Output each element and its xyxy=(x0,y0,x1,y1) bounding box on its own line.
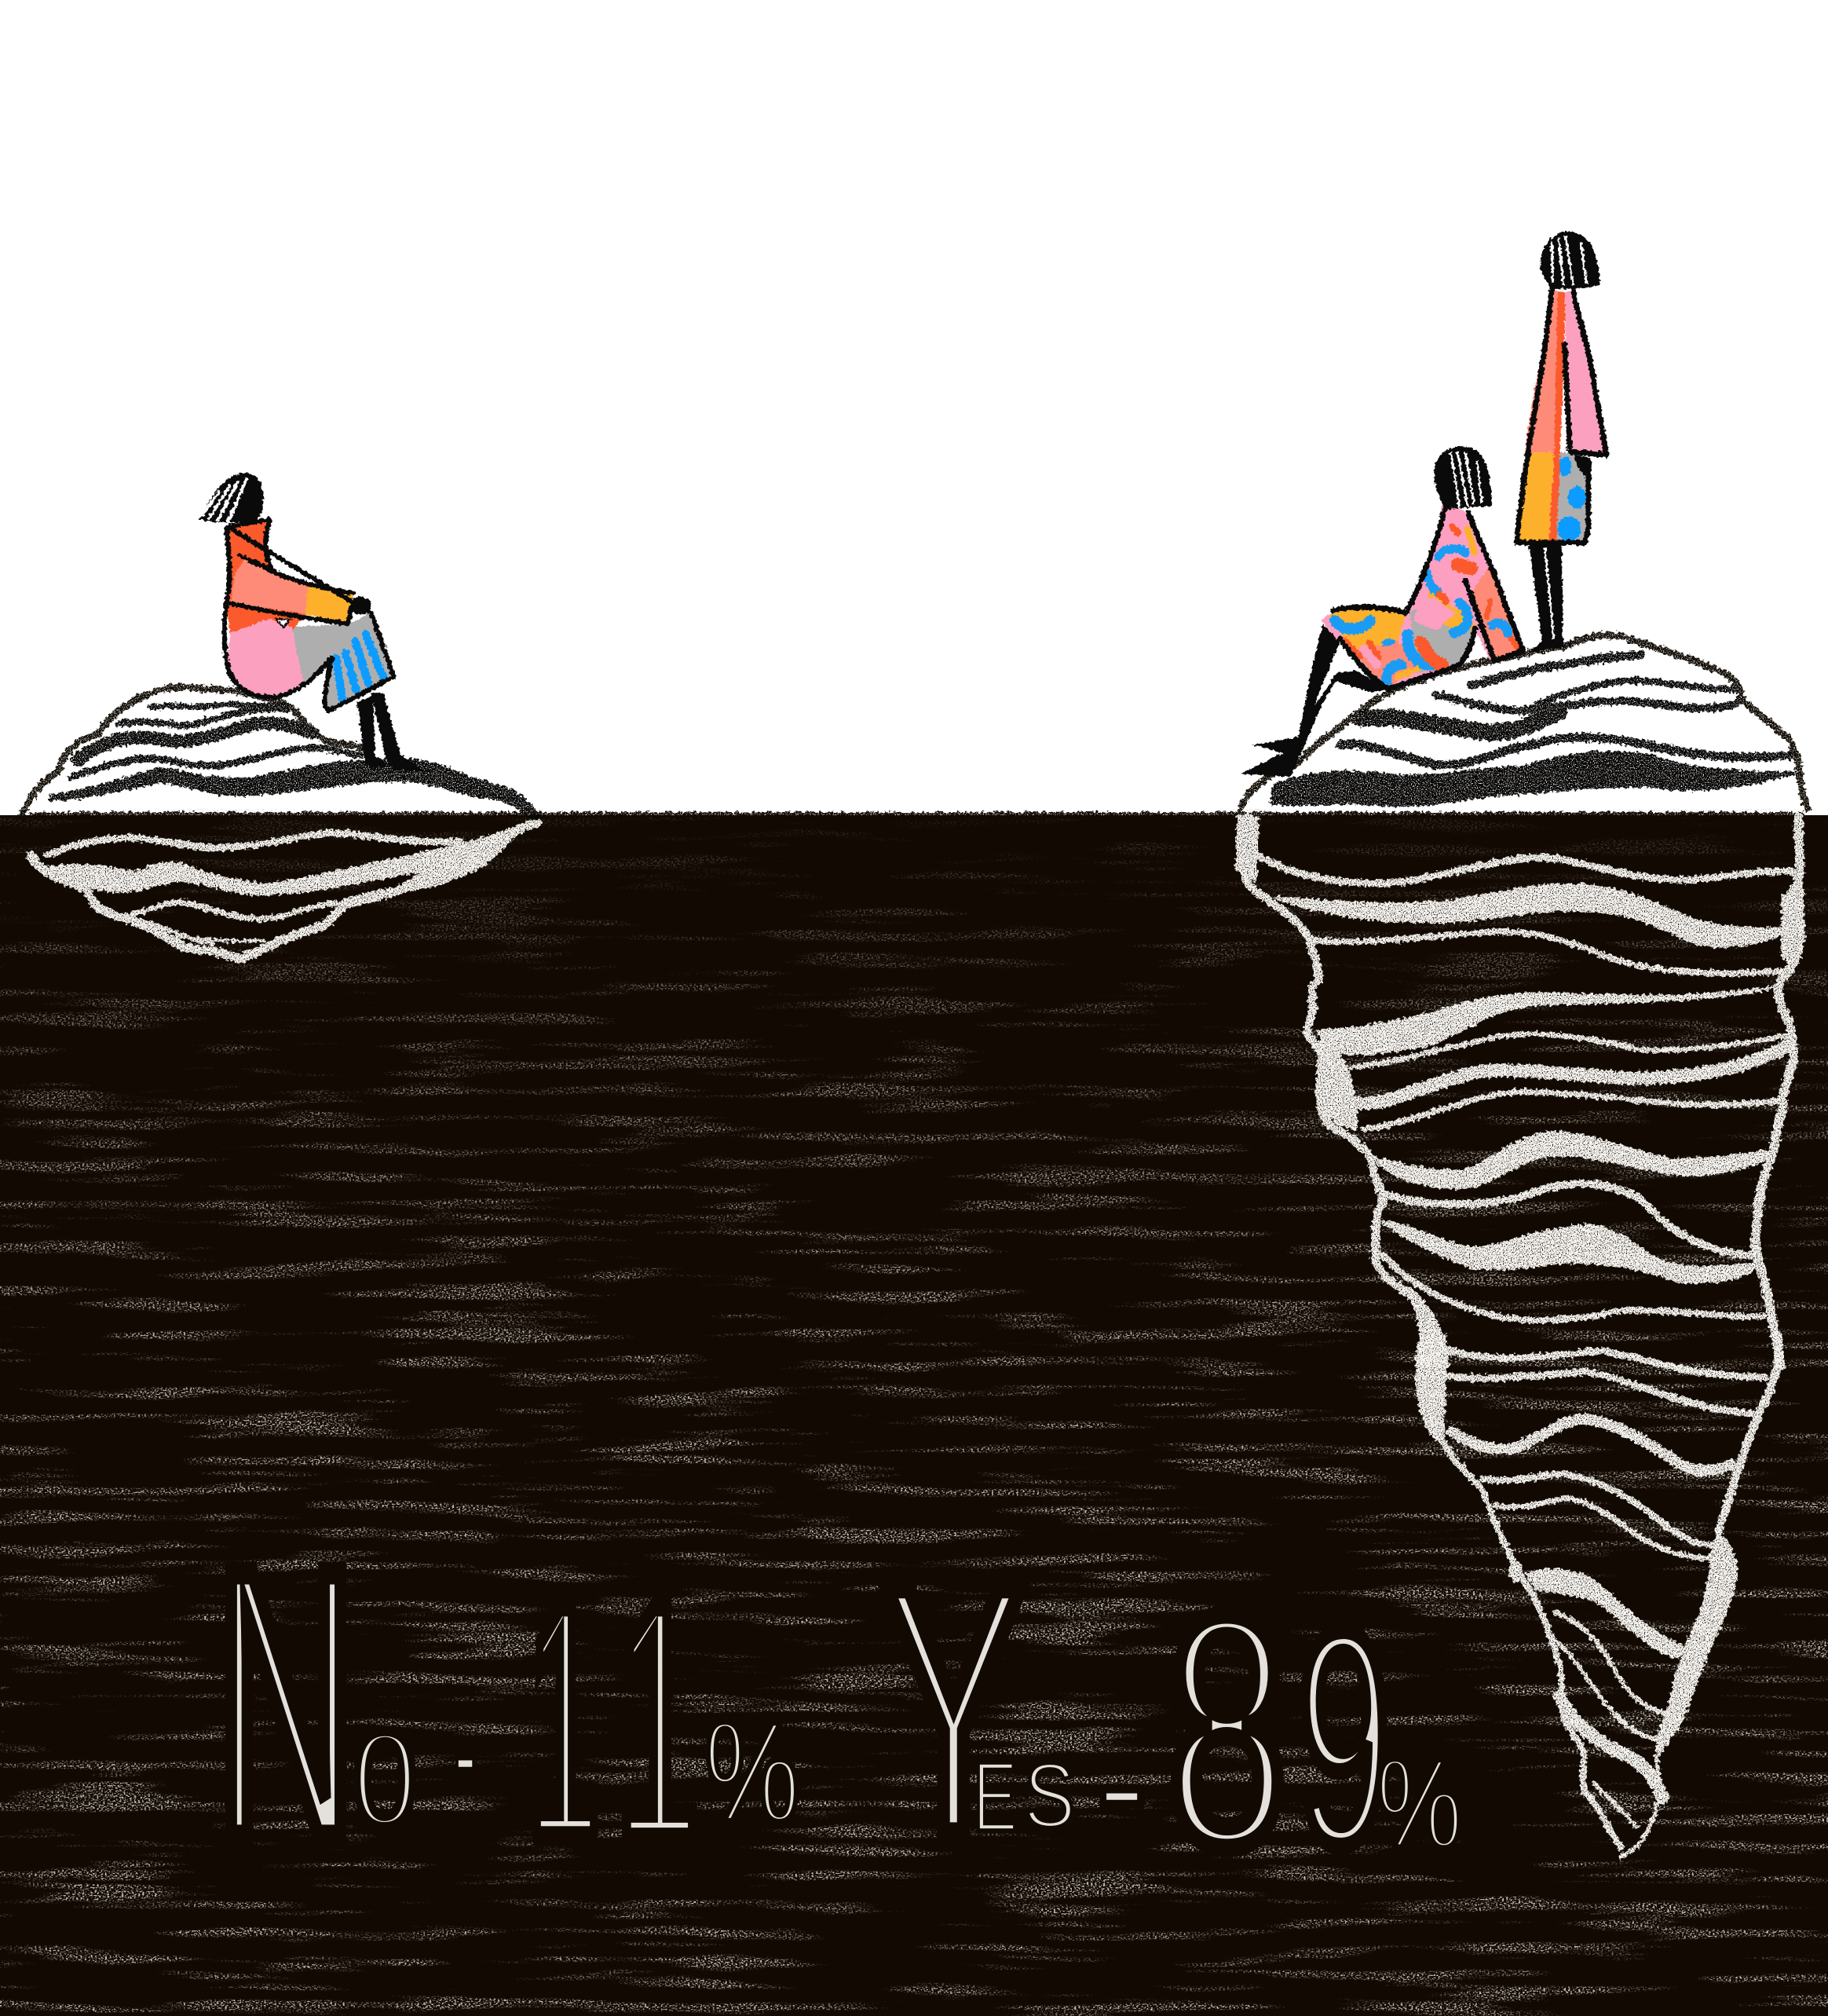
right iceberg above water xyxy=(1241,635,1808,809)
dress pattern patches xyxy=(1329,609,1406,653)
outline xyxy=(1516,288,1607,543)
caption: No - 11% Yes - 89% xyxy=(215,1490,1462,1917)
hair xyxy=(1541,231,1600,289)
person: seated figure hugging knees on left iceberg xyxy=(199,473,426,772)
coat torso xyxy=(227,520,308,634)
caption: No - 11% Yes - 89%: % xyxy=(704,1692,800,1853)
pink hip xyxy=(227,619,303,697)
legs xyxy=(1241,625,1388,777)
dress outline xyxy=(1333,510,1523,689)
caption: No - 11% Yes - 89%: Y xyxy=(882,1512,1026,1909)
caption: No - 11% Yes - 89%: 9 xyxy=(1298,1568,1391,1908)
figure outlines xyxy=(225,520,393,712)
salmon sleeve xyxy=(231,558,308,613)
hand xyxy=(349,597,371,615)
legs xyxy=(357,695,391,769)
yellow cuff xyxy=(305,583,354,624)
pink scarf xyxy=(1565,290,1607,455)
right iceberg below water: upper section xyxy=(1237,817,1804,1367)
caption: No - 11% Yes - 89%: S xyxy=(1024,1743,1075,1846)
caption: No - 11% Yes - 89%: - xyxy=(454,1637,477,1857)
caption: No - 11% Yes - 89%: 1 xyxy=(615,1535,700,1909)
caption: No - 11% Yes - 89%: - xyxy=(1096,1671,1147,1890)
caption: No - 11% Yes - 89%: N xyxy=(215,1490,356,1917)
hair xyxy=(199,473,264,522)
yellow panel xyxy=(1518,452,1554,543)
dark water background xyxy=(0,812,1828,2016)
hair xyxy=(1435,446,1492,510)
left iceberg above water xyxy=(22,687,539,818)
caption: No - 11% Yes - 89%: 1 xyxy=(527,1535,600,1908)
right iceberg below water: lower section xyxy=(1417,1335,1779,1857)
legs xyxy=(1529,544,1563,652)
person: standing figure with pink scarf xyxy=(1516,231,1607,652)
patterned dress xyxy=(1321,503,1523,689)
grey polka panel xyxy=(1554,452,1589,543)
blue skirt stripes xyxy=(336,634,383,701)
coat salmon panel xyxy=(1525,290,1563,452)
orange stripe xyxy=(1548,292,1566,543)
caption: No - 11% Yes - 89%: E xyxy=(973,1741,1018,1852)
caption: No - 11% Yes - 89%: o xyxy=(353,1667,417,1864)
caption: No - 11% Yes - 89%: 8 xyxy=(1167,1547,1287,1915)
skirt xyxy=(292,612,393,712)
person: seated figure in patterned dress xyxy=(1241,446,1523,777)
left iceberg below water xyxy=(31,823,537,959)
caption: No - 11% Yes - 89%: % xyxy=(1376,1733,1462,1875)
